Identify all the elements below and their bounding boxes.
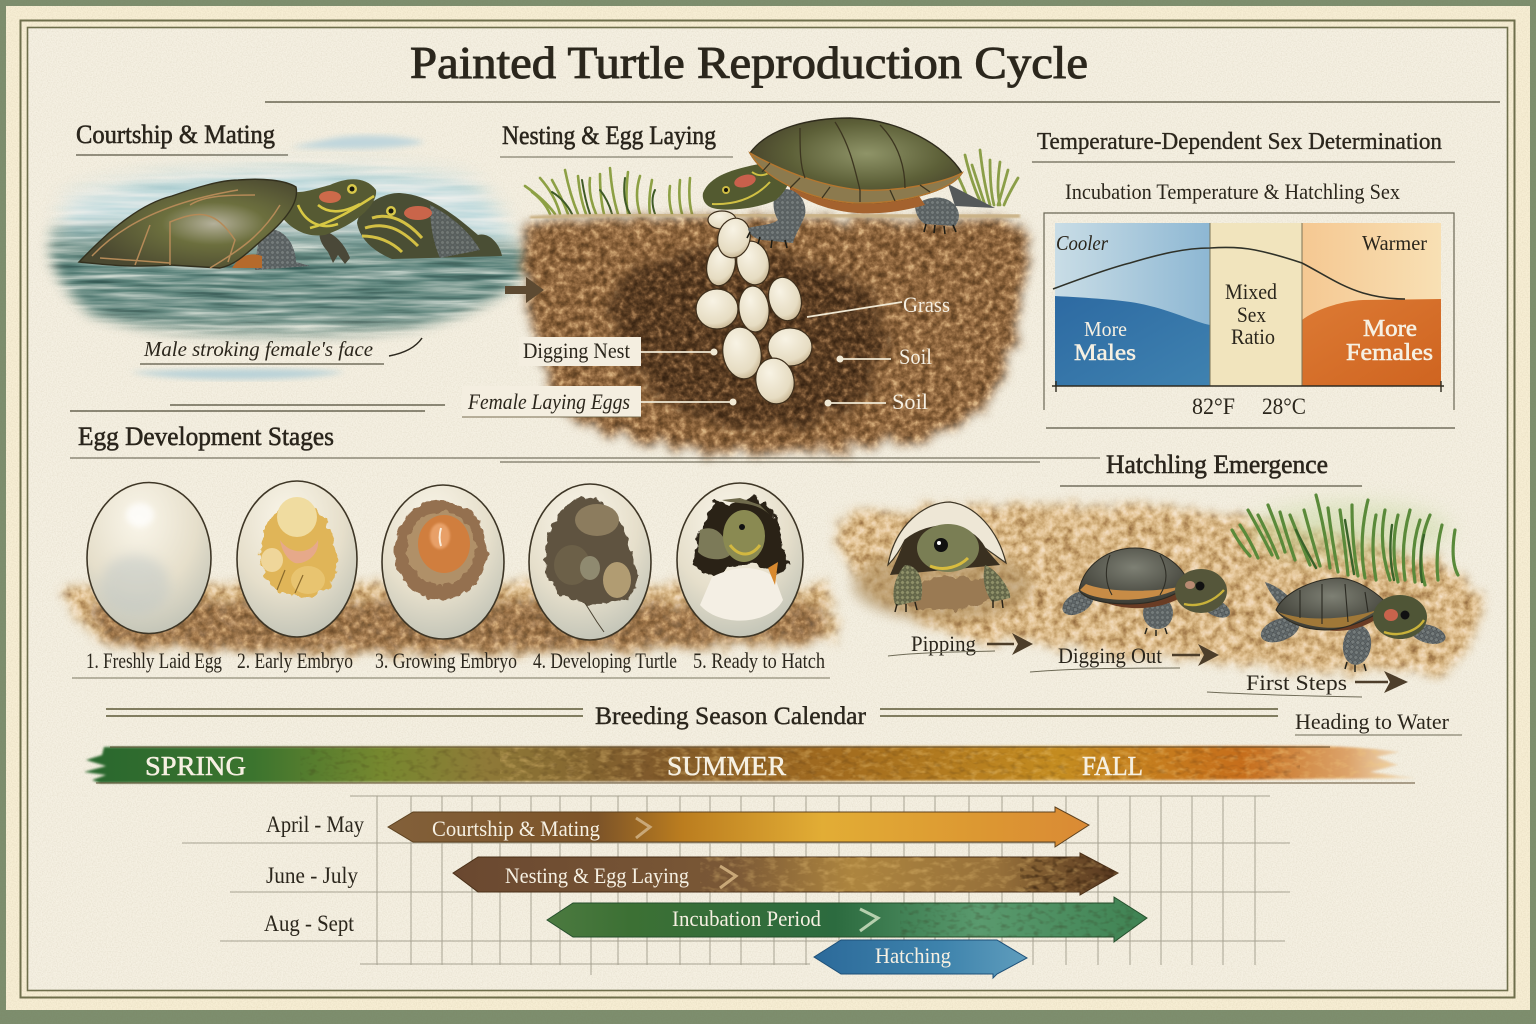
heading: hatchling: Hatchling Emergence — [1106, 450, 1328, 479]
bar: incubation period: Incubation Period — [672, 906, 821, 931]
icon: hatchling first steps — [1257, 578, 1448, 672]
icon: egg 5 ready to hatch — [677, 483, 803, 637]
bar: nesting and egg laying — [452, 852, 1119, 896]
heading: egg stages: Egg Development Stages — [78, 422, 334, 451]
panel: temperature-dependent sex determination — [1032, 129, 1455, 428]
egg stage labels: 3. Growing Embryo — [375, 648, 517, 673]
icon: female turtle — [357, 193, 502, 259]
hatchling labels and arrows: Pipping — [911, 631, 976, 656]
chart: temperature bands: Mixed — [1225, 279, 1277, 304]
icon: male turtle — [79, 179, 376, 270]
month labels — [264, 812, 364, 936]
panel: courtship and mating — [30, 120, 550, 380]
labels on soil: Digging Nest — [523, 338, 630, 363]
caption: male stroking: Male stroking female's face — [143, 337, 373, 361]
chart: temperature bands: More — [1084, 317, 1127, 341]
month labels: June - July — [266, 863, 358, 888]
hatchling labels and arrows: Digging Out — [1058, 643, 1162, 668]
season band — [84, 744, 1415, 785]
arrow: to nesting — [505, 277, 544, 303]
labels on soil: Soil — [899, 344, 932, 369]
chart: temperature bands: Ratio — [1231, 324, 1275, 349]
chart: temperature bands: 28°C — [1262, 394, 1306, 419]
ground — [820, 485, 1500, 685]
icon: hatchling pipping — [852, 502, 1032, 621]
chart: temperature bands: Warmer — [1362, 231, 1427, 255]
labels on soil: Female Laying Eggs — [467, 389, 630, 414]
labels on soil — [462, 292, 950, 417]
labels on soil: Grass — [903, 292, 950, 317]
bar: hatching — [814, 940, 1027, 978]
heading: courtship: Courtship & Mating — [76, 120, 275, 149]
icon: egg 1 freshly laid — [87, 482, 211, 634]
season band: SUMMER — [667, 751, 786, 781]
icon: egg 3 growing embryo — [382, 485, 504, 639]
water scene — [30, 136, 550, 380]
chart: temperature bands: More — [1363, 316, 1417, 342]
chart: temperature bands: Females — [1346, 340, 1433, 366]
heading: nesting: Nesting & Egg Laying — [502, 121, 716, 150]
season band: SPRING — [145, 751, 246, 781]
egg stage labels: 2. Early Embryo — [237, 648, 353, 673]
heading: calendar: Breeding Season Calendar — [595, 703, 867, 730]
curve — [1053, 247, 1405, 299]
bar: incubation period — [547, 895, 1150, 945]
bar: courtship and mating — [388, 807, 1089, 847]
soil under eggs — [45, 565, 855, 665]
chart: temperature bands — [1044, 213, 1454, 419]
icon: nesting turtle — [703, 118, 995, 248]
bar: nesting and egg laying: Nesting & Egg Laying — [505, 863, 689, 888]
grass around nest — [525, 150, 1018, 214]
season band: FALL — [1082, 751, 1143, 781]
grass — [1232, 495, 1458, 585]
heading: temperature: Temperature-Dependent Sex Determination — [1037, 129, 1442, 155]
chart: temperature bands: 82°F — [1192, 394, 1235, 419]
egg stage labels — [86, 648, 825, 673]
icon: hatchling digging out — [1058, 548, 1233, 636]
egg stage labels: 5. Ready to Hatch — [693, 648, 825, 673]
chart subtitle: Incubation Temperature & Hatchling Sex — [1065, 179, 1400, 204]
panel: hatchling emergence — [820, 450, 1500, 735]
hatchling labels and arrows: First Steps — [1246, 670, 1347, 695]
title: Painted Turtle Reproduction Cycle — [410, 37, 1088, 88]
panel: nesting and egg laying — [462, 118, 1045, 470]
bar: hatching: Hatching — [875, 943, 951, 968]
hatchling labels and arrows — [888, 631, 1462, 735]
panel: egg development stages — [45, 422, 1100, 678]
month labels: April - May — [266, 812, 364, 837]
icon: eggs in nest — [696, 211, 812, 407]
panel: breeding season calendar — [60, 703, 1420, 978]
hatchling labels and arrows: Heading to Water — [1295, 709, 1450, 734]
bar: courtship and mating: Courtship & Mating — [432, 816, 600, 841]
calendar grid — [182, 796, 1290, 975]
bar: more females — [1302, 299, 1441, 386]
month labels: Aug - Sept — [264, 911, 355, 936]
chart: temperature bands: Cooler — [1056, 231, 1109, 255]
egg stage labels: 1. Freshly Laid Egg — [86, 648, 222, 673]
icon: egg 2 early embryo — [237, 481, 357, 637]
egg stage labels: 4. Developing Turtle — [533, 648, 677, 673]
labels on soil: Soil — [892, 389, 928, 414]
chart: temperature bands: Sex — [1237, 302, 1266, 327]
chart: temperature bands: Males — [1074, 340, 1136, 365]
soil cross-section — [514, 206, 1038, 466]
icon: egg 4 developing turtle — [529, 484, 651, 640]
bar: more males — [1055, 296, 1210, 386]
